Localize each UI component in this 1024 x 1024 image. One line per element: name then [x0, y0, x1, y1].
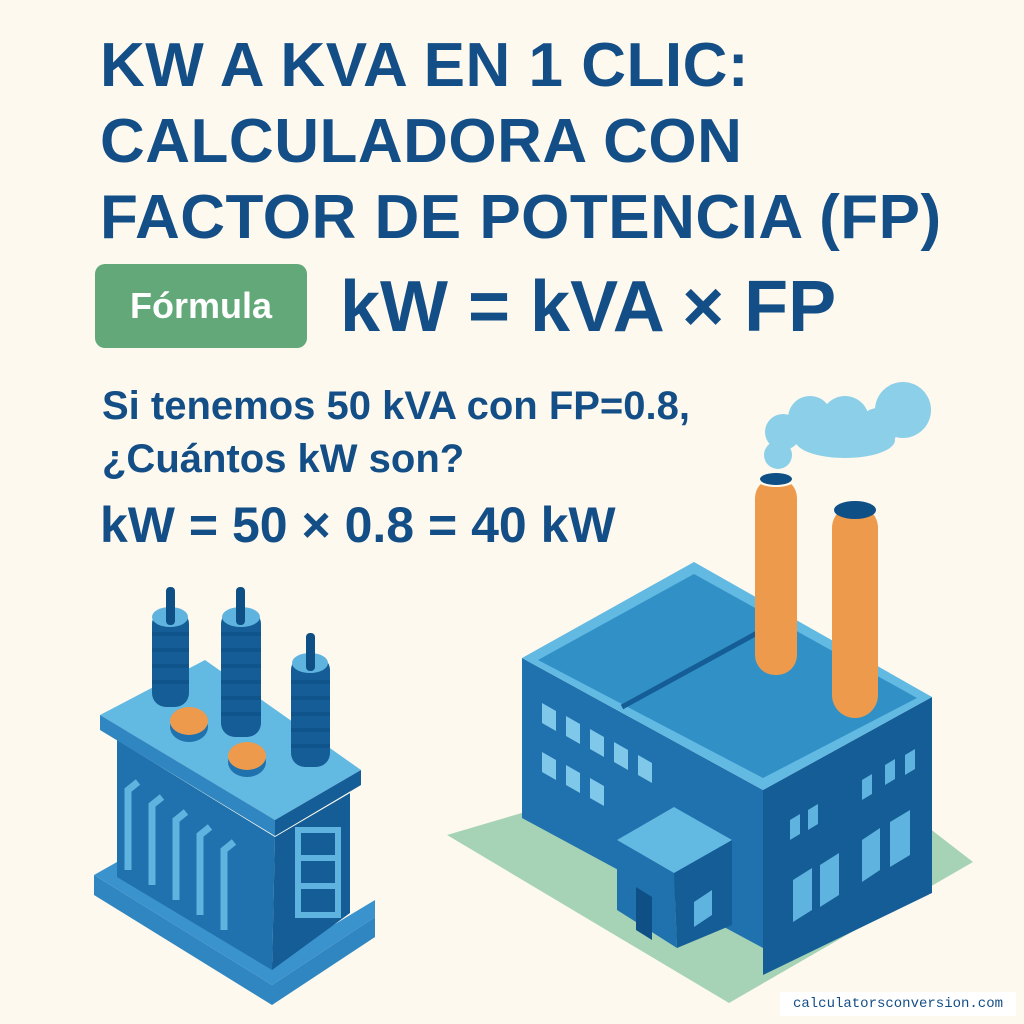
icon: factory: [447, 382, 973, 1003]
insulators: [152, 610, 330, 767]
icon: smoke: [764, 382, 931, 469]
formula badge: [95, 264, 307, 348]
watermark: [780, 992, 1016, 1016]
title: KW A KVA EN 1 CLIC:: [100, 31, 749, 100]
question: ¿Cuántos kW son?: [102, 437, 464, 481]
formula badge: Fórmula: [130, 285, 272, 326]
title: CALCULADORA CON: [100, 107, 742, 176]
title: FACTOR DE POTENCIA (FP): [100, 183, 942, 252]
icon: transformer: [94, 587, 375, 1005]
title: [100, 31, 942, 252]
result: kW = 50 × 0.8 = 40 kW: [100, 497, 616, 553]
question: [102, 384, 690, 481]
question: Si tenemos 50 kVA con FP=0.8,: [102, 384, 690, 428]
formula: kW = kVA × FP: [340, 267, 836, 347]
watermark: calculatorsconversion.com: [793, 996, 1003, 1012]
